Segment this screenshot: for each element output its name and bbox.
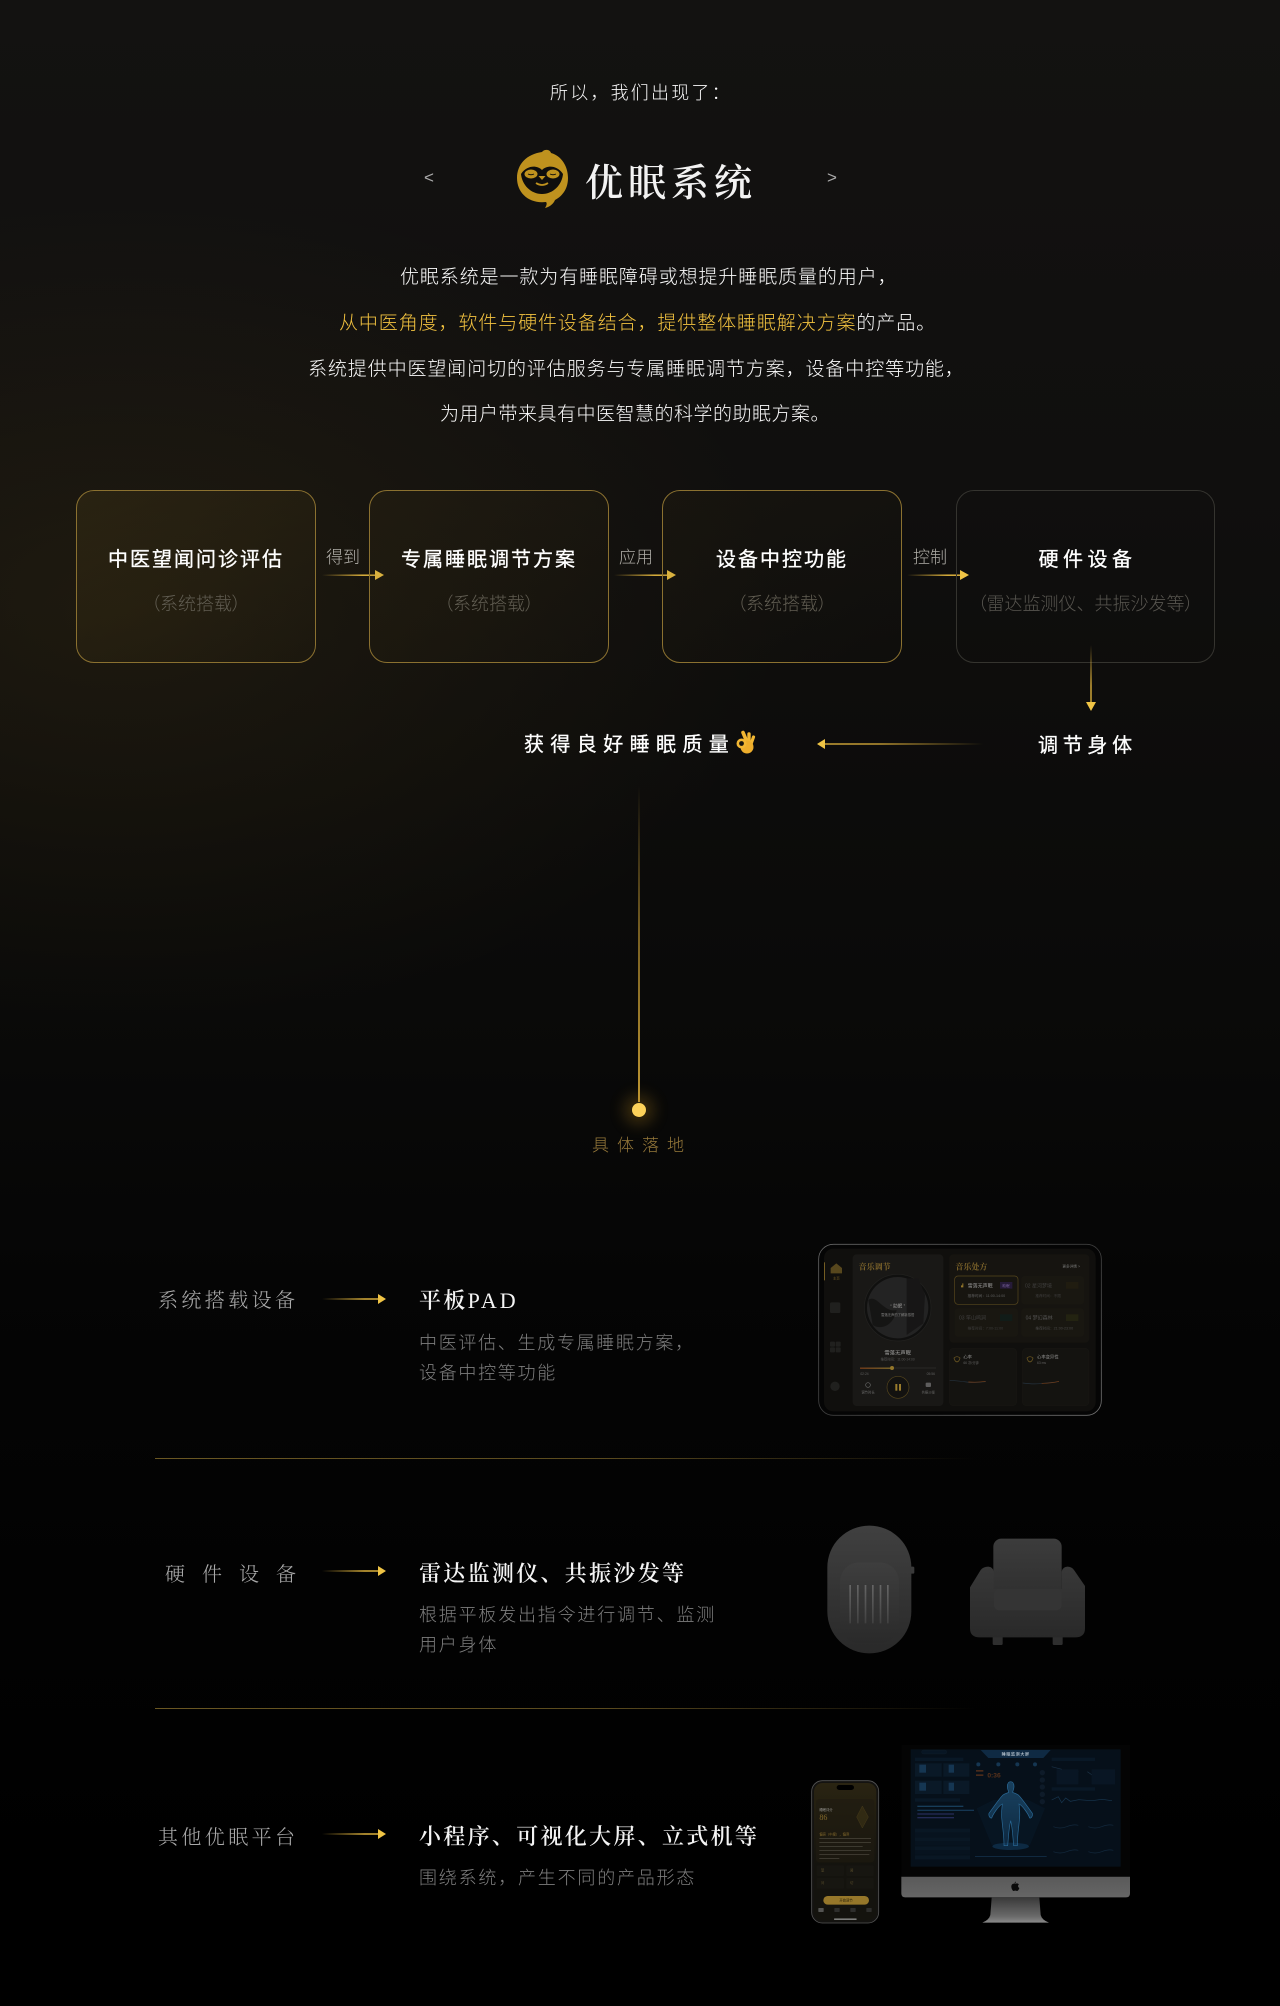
icon: ok hand	[736, 730, 756, 754]
tablet mockup: 推荐时间：不限	[1035, 1293, 1061, 1298]
desktop monitor	[901, 1745, 1130, 1923]
tablet mockup: 推荐时间：21:00-23:00	[1035, 1325, 1073, 1330]
label: 获得良好睡眠质量: 获得良好睡眠质量	[524, 734, 735, 756]
arrow	[324, 570, 384, 580]
divider	[155, 1458, 975, 1459]
arrow	[616, 570, 676, 580]
row heading: 平板PAD	[419, 1288, 519, 1313]
desktop monitor: 睡眠监测大屏	[1002, 1751, 1030, 1757]
intro line: 所以，我们出现了：	[550, 83, 732, 103]
right bracket: >	[827, 168, 837, 187]
row label: 硬件设备	[165, 1564, 313, 1586]
label: 具体落地: 具体落地	[592, 1136, 692, 1155]
arrow	[908, 570, 969, 580]
row description line 2: 用户身体	[419, 1635, 498, 1655]
intro paragraph	[308, 267, 965, 425]
card subtitle: （雷达监测仪、共振沙发等）	[978, 594, 1194, 614]
phone: 问	[821, 1880, 825, 1885]
card title: 设备中控功能	[716, 549, 848, 571]
card subtitle: （系统搭载）	[444, 594, 534, 614]
tablet mockup: 共振沙发	[922, 1390, 936, 1395]
tablet mockup	[818, 1244, 1102, 1416]
connector line	[638, 786, 640, 1108]
panel: 设备中控功能	[662, 490, 902, 663]
desktop monitor: 0:36	[987, 1772, 1001, 1779]
tablet mockup: 主页	[833, 1276, 840, 1281]
panel: 硬件设备	[956, 490, 1215, 663]
row heading: 雷达监测仪、共振沙发等	[419, 1561, 686, 1586]
paragraph line 4: 为用户带来具有中医智慧的科学的助眠方案。	[440, 404, 830, 425]
label: 得到: 得到	[326, 548, 360, 567]
paragraph line 1: 优眠系统是一款为有睡眠障碍或想提升睡眠质量的用户，	[400, 267, 898, 288]
row description line 1: 根据平板发出指令进行调节、监测	[419, 1605, 716, 1625]
phone and desktop mockups	[811, 1749, 1130, 1924]
tablet mockup: 03 竿山鸣涧	[959, 1315, 986, 1322]
tablet mockup: 推荐时间：11:00-14:00	[968, 1293, 1005, 1298]
tablet mockup: 05:56	[927, 1372, 935, 1376]
row: 其他优眠平台	[158, 1824, 759, 1888]
tablet mockup: 推荐时间：7:00-11:00	[968, 1325, 1003, 1330]
label: 调节身体: 调节身体	[1038, 735, 1137, 757]
row: 硬件设备	[165, 1561, 716, 1655]
tablet mockup: 助眠	[1002, 1283, 1010, 1288]
phone: 闻	[850, 1868, 854, 1873]
row: 系统搭载设备	[158, 1288, 695, 1383]
row description line 1: 中医评估、生成专属睡眠方案，	[419, 1333, 695, 1353]
paragraph line 3: 系统提供中医望闻问切的评估服务与专属睡眠调节方案，设备中控等功能，	[308, 359, 965, 380]
arrow: down	[1086, 646, 1096, 711]
radar device and resonance sofa	[827, 1526, 1085, 1654]
row heading: 小程序、可视化大屏、立式机等	[419, 1824, 759, 1849]
tablet mockup: 04 梦幻森林	[1026, 1315, 1053, 1322]
card subtitle: （系统搭载）	[737, 594, 827, 614]
label: 控制: 控制	[913, 548, 947, 567]
row label: 系统搭载设备	[158, 1290, 298, 1312]
phone: 睡眠评分	[819, 1807, 833, 1812]
tablet mockup: 雪落无声眠	[884, 1348, 912, 1356]
icon: radar device	[827, 1526, 914, 1653]
card title: 专属睡眠调节方案	[401, 549, 577, 571]
icon: sloth logo	[517, 150, 568, 208]
logo wordmark: 优眠系统	[585, 163, 757, 205]
paragraph line 2 with highlight: 从中医角度，软件与硬件设备结合，提供整体睡眠解决方案的产品。	[339, 313, 936, 334]
left bracket: <	[424, 168, 434, 187]
divider	[155, 1708, 975, 1709]
tablet mockup: 心率	[963, 1353, 973, 1360]
row arrow	[324, 1829, 386, 1839]
tablet mockup: 02 星河梦境	[1025, 1282, 1052, 1289]
row description: 围绕系统，产生不同的产品形态	[419, 1868, 696, 1888]
tablet mockup: 63 ms	[1037, 1361, 1046, 1365]
tablet mockup: 音乐调节	[859, 1261, 891, 1271]
phone: 86	[819, 1813, 827, 1822]
card title: 中医望闻问诊评估	[108, 549, 284, 571]
phone	[812, 1781, 879, 1923]
label: 应用: 应用	[619, 548, 653, 567]
tablet mockup: 雪落无声眠	[968, 1282, 993, 1289]
phone: 切	[850, 1880, 854, 1885]
panel: 中医望闻问诊评估	[76, 490, 316, 663]
tablet mockup: “ 助眠 ”	[890, 1302, 906, 1309]
card title: 硬件设备	[1038, 549, 1136, 571]
phone: 开始调节	[839, 1898, 853, 1903]
phone: 偏亮（中度），偏寒	[819, 1831, 850, 1836]
tablet mockup: 音乐处方	[955, 1261, 987, 1271]
panel: 专属睡眠调节方案	[369, 490, 609, 663]
row arrow	[324, 1294, 386, 1304]
arrow: left	[817, 739, 978, 749]
phone: 望	[821, 1868, 825, 1873]
tablet mockup: 66 次/分钟	[963, 1360, 980, 1365]
glowing dot	[632, 1103, 646, 1117]
tablet mockup: 推荐时间：11:00-14:00	[881, 1357, 915, 1362]
row arrow	[324, 1566, 386, 1576]
icon: sofa	[970, 1539, 1085, 1645]
tablet mockup: 调节时长	[861, 1390, 875, 1395]
tablet mockup: 雪落无声的了解新感悟	[881, 1312, 915, 1317]
row label: 其他优眠平台	[158, 1827, 298, 1849]
tablet mockup: 心率变异性	[1037, 1353, 1059, 1360]
tablet mockup: 02:24	[860, 1372, 869, 1376]
card subtitle: （系统搭载）	[151, 594, 241, 614]
tablet mockup: 更多详情 >	[1062, 1263, 1080, 1268]
row description line 2: 设备中控等功能	[419, 1363, 557, 1383]
